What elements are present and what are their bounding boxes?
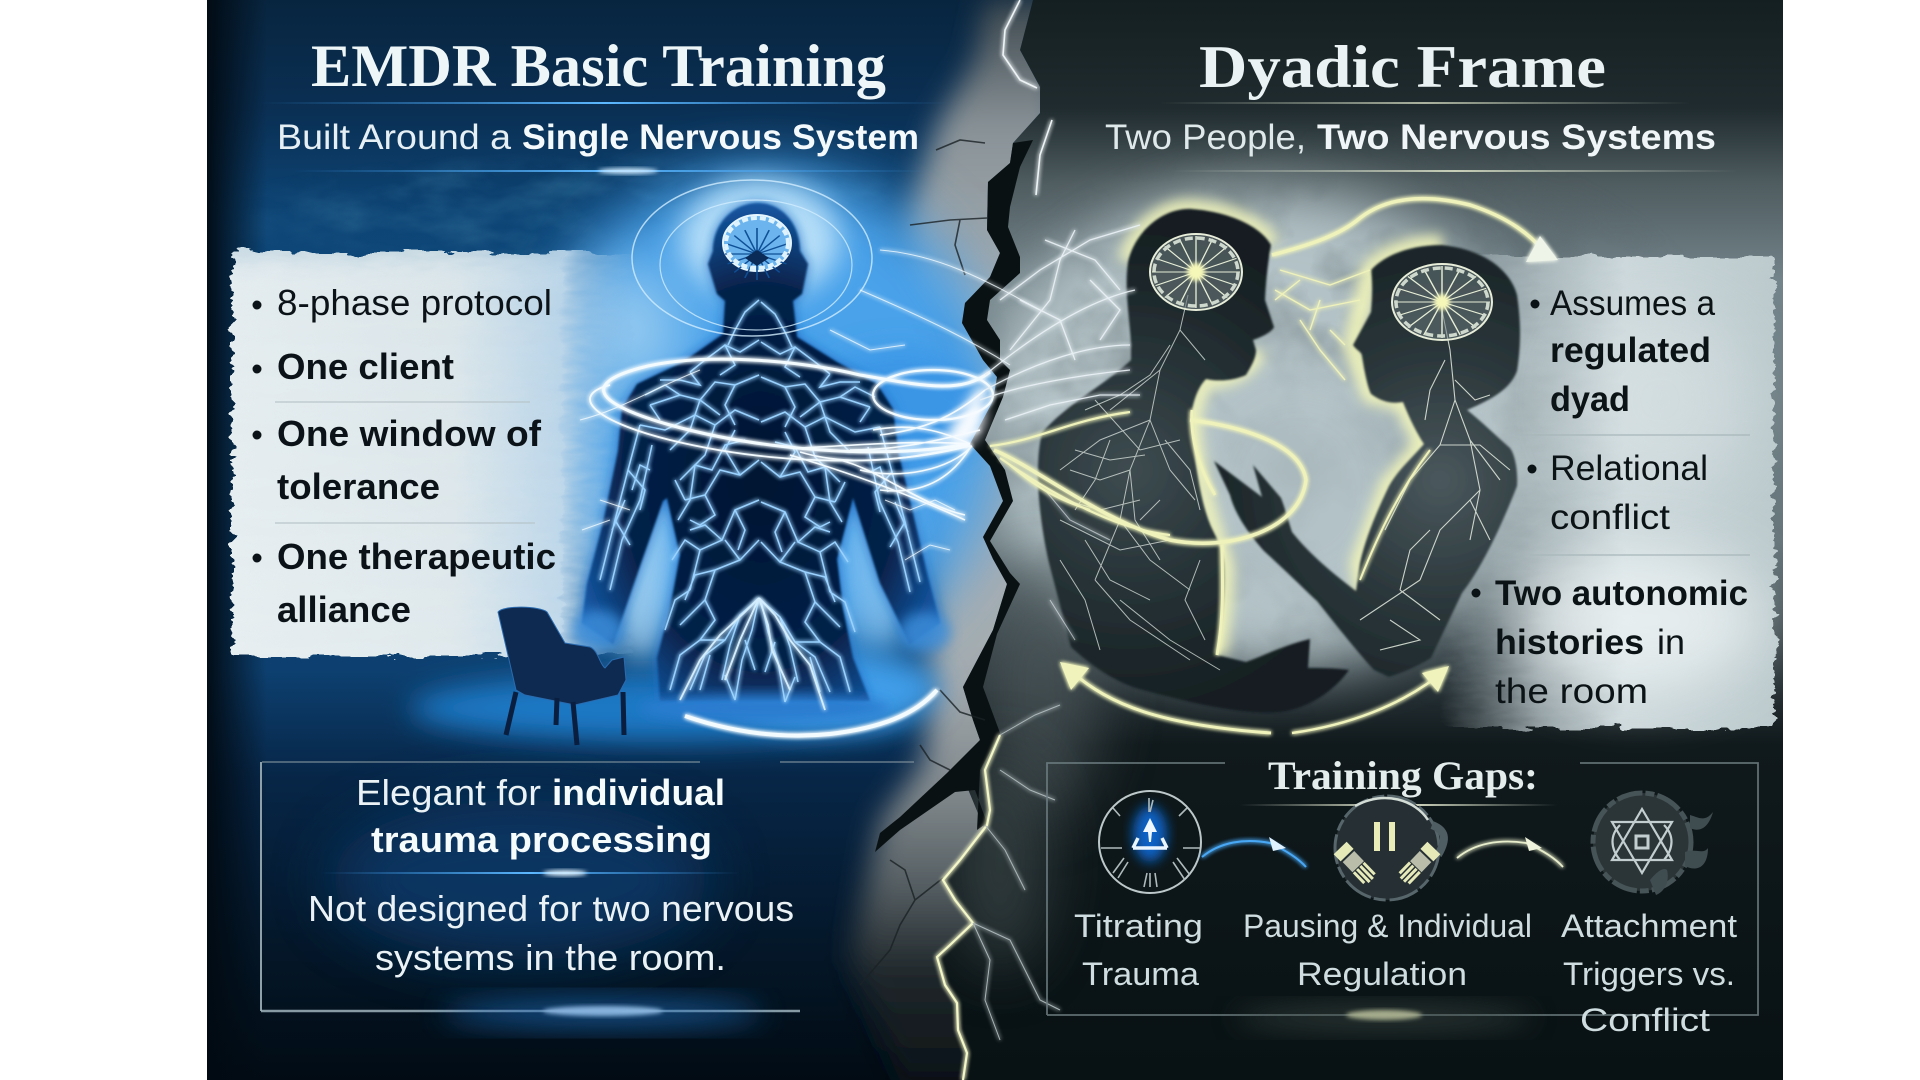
title: EMDR Basic Training (311, 33, 886, 99)
yellow energy between the couple (990, 199, 1545, 655)
card dividers (1515, 435, 1750, 555)
panel: left title (260, 33, 950, 174)
subtitle: Two People, (1105, 118, 1306, 157)
body veins (600, 300, 920, 702)
brain, woman (1392, 264, 1492, 340)
subtitle (1105, 118, 1716, 157)
figure: single nervous system (572, 203, 951, 722)
subtitle (277, 118, 919, 157)
right bullet card (1440, 256, 1774, 728)
text block: left bullets: One client (277, 346, 454, 387)
gap labels: Regulation (1297, 956, 1467, 992)
text block: right bullets: the room (1495, 672, 1648, 711)
arrow: titrating to pausing (1202, 837, 1314, 867)
icon: attachment triggers (1593, 793, 1713, 895)
text block: right bullets: Assumes a (1550, 284, 1716, 323)
panel: right title (1105, 34, 1740, 172)
white burst at crack (945, 375, 985, 446)
gap labels (1074, 908, 1737, 1038)
text block: left bullets: One window of (277, 413, 542, 454)
text block: right bullets (1472, 284, 1748, 711)
crack down the centre (860, 140, 1033, 985)
gap labels: Attachment (1561, 908, 1737, 944)
gap labels: Trauma (1082, 956, 1199, 992)
text block: right bullets: regulated (1550, 331, 1711, 370)
card dividers (275, 402, 535, 523)
text block: left bullets: 8-phase protocol (277, 282, 552, 323)
arrow: arc over the couple (1526, 236, 1558, 262)
panel: training gaps (1047, 753, 1758, 1038)
text block: right bullets: conflict (1550, 498, 1670, 537)
callout text: trauma processing (371, 819, 712, 860)
text block: right bullets: Two autonomic (1495, 574, 1748, 613)
chair (498, 607, 626, 745)
left bullet card (232, 252, 632, 656)
text block: right bullets: Relational (1550, 449, 1708, 488)
heading: Training Gaps: (1268, 753, 1538, 798)
brain, man (1150, 234, 1242, 310)
root branches (680, 598, 825, 710)
callout text: individual (552, 772, 725, 813)
icon: pausing hands (1334, 796, 1444, 900)
lightning across right panel (980, 225, 1140, 640)
callout: elegant for individual (261, 762, 914, 1027)
arrow: right lower arrow (1292, 666, 1449, 733)
bottom arc arrow, left (685, 690, 937, 736)
woman silhouette (1214, 245, 1520, 677)
gap labels: Titrating (1074, 908, 1203, 944)
text block: left bullets (252, 282, 556, 630)
nerve lines, woman (1360, 310, 1510, 650)
text block: right bullets: in (1657, 623, 1685, 662)
brain (723, 215, 791, 280)
gap labels: Conflict (1580, 1002, 1710, 1038)
couple figures (1038, 209, 1520, 713)
spine (757, 262, 761, 598)
energy rings around head (632, 180, 872, 336)
callout text (308, 772, 794, 978)
background: left panel (207, 0, 1060, 1080)
background: right panel (860, 0, 1790, 1080)
subtitle: Single Nervous System (522, 118, 919, 157)
orbit around body, flowing to crack (580, 250, 1040, 560)
subtitle: Two Nervous Systems (1317, 118, 1716, 157)
gap labels: Pausing & Individual (1243, 908, 1532, 944)
icon: titrating clock (1099, 791, 1201, 893)
gap labels: Triggers vs. (1563, 956, 1735, 992)
arrow: left lower arrow (1060, 662, 1271, 733)
arrow: pausing to attachment (1457, 837, 1570, 867)
title: Dyadic Frame (1199, 34, 1606, 100)
text block: right bullets: histories (1495, 623, 1644, 662)
text block: left bullets: alliance (277, 589, 411, 630)
callout text: Not designed for two nervous (308, 888, 794, 929)
text block: right bullets: dyad (1550, 380, 1630, 419)
subtitle: Built Around a (277, 118, 512, 157)
stone texture beside crack (850, 0, 1060, 1080)
man silhouette (1038, 209, 1349, 713)
text block: left bullets: One therapeutic (277, 536, 556, 577)
ground glow (410, 674, 910, 742)
callout text: Elegant for (356, 772, 541, 813)
text block: left bullets: tolerance (277, 466, 440, 507)
main lightning bolt (937, 0, 1060, 1080)
callout text: systems in the room. (375, 937, 726, 978)
nerve lines, man (1060, 295, 1220, 670)
blue aura (525, 170, 1005, 670)
aura (1128, 209, 1271, 655)
